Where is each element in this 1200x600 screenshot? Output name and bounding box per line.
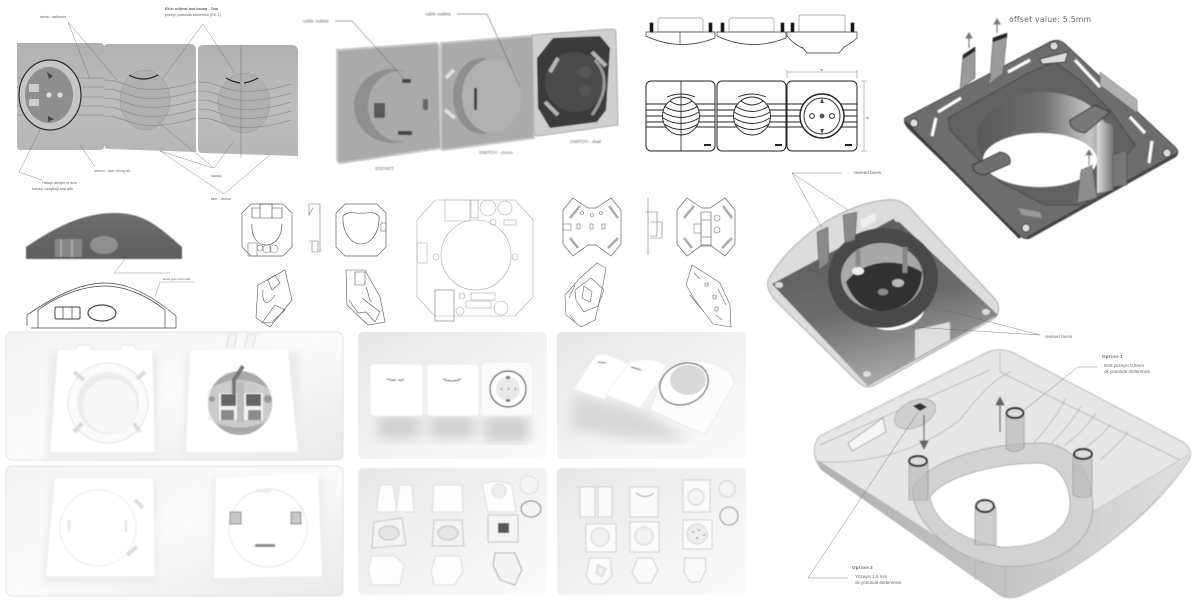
modules: [574, 354, 735, 435]
photo: exploded parts front: [358, 468, 547, 595]
callout: option 1: [1102, 354, 1150, 374]
photo: perspective view of modules: [557, 332, 746, 459]
tile: mono switch: [104, 44, 196, 152]
annotation labels: kanaq: [211, 174, 221, 178]
frame body: [904, 40, 1178, 239]
crescent opening: [857, 305, 925, 330]
shadow: [570, 395, 690, 440]
callout: option 2: Option-2: [852, 565, 873, 570]
PCB B large plan: [417, 200, 533, 321]
annotation leaders: [19, 22, 270, 194]
annotation labels: Hatayi dengin el ana: [42, 181, 78, 185]
PCB C views: [563, 198, 621, 256]
rear labels: cable outlets: [303, 18, 329, 24]
annotation labels: Ekle: orijinal ana kanaq - Tam: [165, 7, 219, 11]
hole and rim: [912, 443, 1093, 567]
empty frame: [50, 345, 155, 452]
callout: option 1: Option-1: [1102, 354, 1123, 359]
direction arrows: [920, 397, 1004, 449]
rear labels: SOCKET: [375, 166, 394, 171]
photo: exploded parts rear: [557, 468, 746, 595]
modules: [370, 362, 533, 416]
screw holes: [775, 216, 990, 377]
PCB C isometric views: [565, 263, 606, 327]
option leaders: [808, 367, 1097, 578]
annotation labels: kenar: radiused: [40, 15, 66, 19]
revised faces callouts: revised faces: [854, 170, 882, 175]
rear tile: dual switch: [532, 29, 618, 136]
plan view: mono switch: [717, 81, 786, 151]
window: [848, 418, 886, 451]
annotation labels: unhun - tam: ebug alt: [94, 169, 131, 173]
rear tile: socket: [337, 43, 441, 163]
dimensions: 85: [866, 116, 870, 120]
panel: rear cover dome detail: [26, 213, 194, 328]
callout: option 2: Yüzeyin 1,5 mm: [855, 574, 888, 579]
tile: socket cover: [17, 43, 104, 150]
rear labels: SWITCH - dual: [570, 139, 601, 144]
offset arrows: [966, 19, 1092, 165]
panel: rear render: [303, 12, 618, 171]
callout: option 2: [852, 565, 901, 585]
dimensions: 85: [820, 68, 824, 72]
plan view: socket: [787, 81, 857, 151]
oval recess: [890, 393, 940, 435]
plan view: dual switch: [646, 81, 715, 151]
bore: [977, 92, 1113, 193]
annotation labels: kanaq: uzaytiag ana alte: [32, 187, 73, 191]
photo: frames closed backs: [6, 466, 343, 596]
dome line drawing: [27, 283, 176, 328]
annotation labels: tam - unhun: [211, 197, 231, 201]
revised faces callouts: revised faces: [1045, 334, 1073, 339]
callout: option 2: ok yönünde ötelenmesi: [855, 580, 901, 585]
disc frame plain: [46, 478, 155, 576]
PCB A isometric views: [256, 270, 292, 327]
shell window: [860, 213, 876, 228]
rear labels: SWITCH - mono: [479, 150, 513, 155]
dome leaders and label: kenar gelen sonu kalit: [163, 277, 190, 281]
dimensions: [787, 68, 870, 151]
frame shadows: [42, 478, 325, 584]
PCB A back: [336, 204, 386, 256]
panel: front render with annotations: [17, 7, 298, 201]
rear tile: mono switch: [441, 36, 534, 150]
revised faces callouts: [792, 170, 1073, 339]
photo: front view of three modules: [358, 332, 547, 459]
panel: technical drawing: [646, 15, 870, 151]
front wall: [817, 455, 1188, 598]
light columns: [915, 322, 950, 359]
callout: option 1: ok yönünde ötelenmesi: [1104, 369, 1150, 374]
callout: option 1: Dört yüzeyin 0,5mm: [1104, 363, 1144, 368]
column: mono switch backs: [630, 487, 659, 583]
frame with terminals: [186, 334, 298, 452]
top elevations: [646, 15, 857, 53]
column: dual switch parts: [368, 485, 414, 585]
rear labels: cable outlets: [425, 12, 451, 16]
revised posts: [817, 212, 857, 270]
raised posts: [960, 33, 1137, 203]
shell: [768, 200, 999, 387]
panel: PCB line drawings: [242, 198, 735, 327]
tubes: [909, 415, 1092, 545]
inner rib lines: [820, 351, 1180, 597]
tube ends: [909, 408, 1092, 512]
dome leaders and label: [114, 258, 194, 297]
shadows: [378, 416, 529, 442]
column: dual switch backs: [580, 487, 616, 584]
frame shadows: [46, 352, 300, 458]
cover shell: [814, 350, 1190, 598]
photo: frames open interior: [6, 332, 343, 460]
socket ring: [19, 60, 81, 130]
panel: translucent cover with options: [814, 350, 1190, 598]
panel: translucent assembly render: [768, 200, 999, 387]
dome render: [26, 213, 182, 259]
cable outlet leaders: [335, 14, 520, 87]
annotation labels: yuzeyi yumusak etkilemeli (EK-1): [165, 13, 222, 17]
base plate: [772, 218, 998, 386]
PCB A side: [309, 204, 320, 252]
annotation labels: [32, 7, 231, 201]
column: socket backs: [683, 480, 738, 582]
slots: [932, 52, 1152, 163]
rear labels: [303, 12, 601, 171]
column: socket parts: [482, 476, 541, 585]
label: offset value: offset value: 5.5mm: [1009, 15, 1091, 24]
panel: frame render with offset arrows: [904, 19, 1178, 239]
disc frame with screws: [214, 473, 322, 578]
tile: dual switch: [198, 45, 298, 158]
tabs: [973, 105, 1110, 218]
socket cup: [828, 228, 938, 328]
PCB A front: [242, 204, 292, 256]
column: mono switch parts: [431, 485, 464, 585]
